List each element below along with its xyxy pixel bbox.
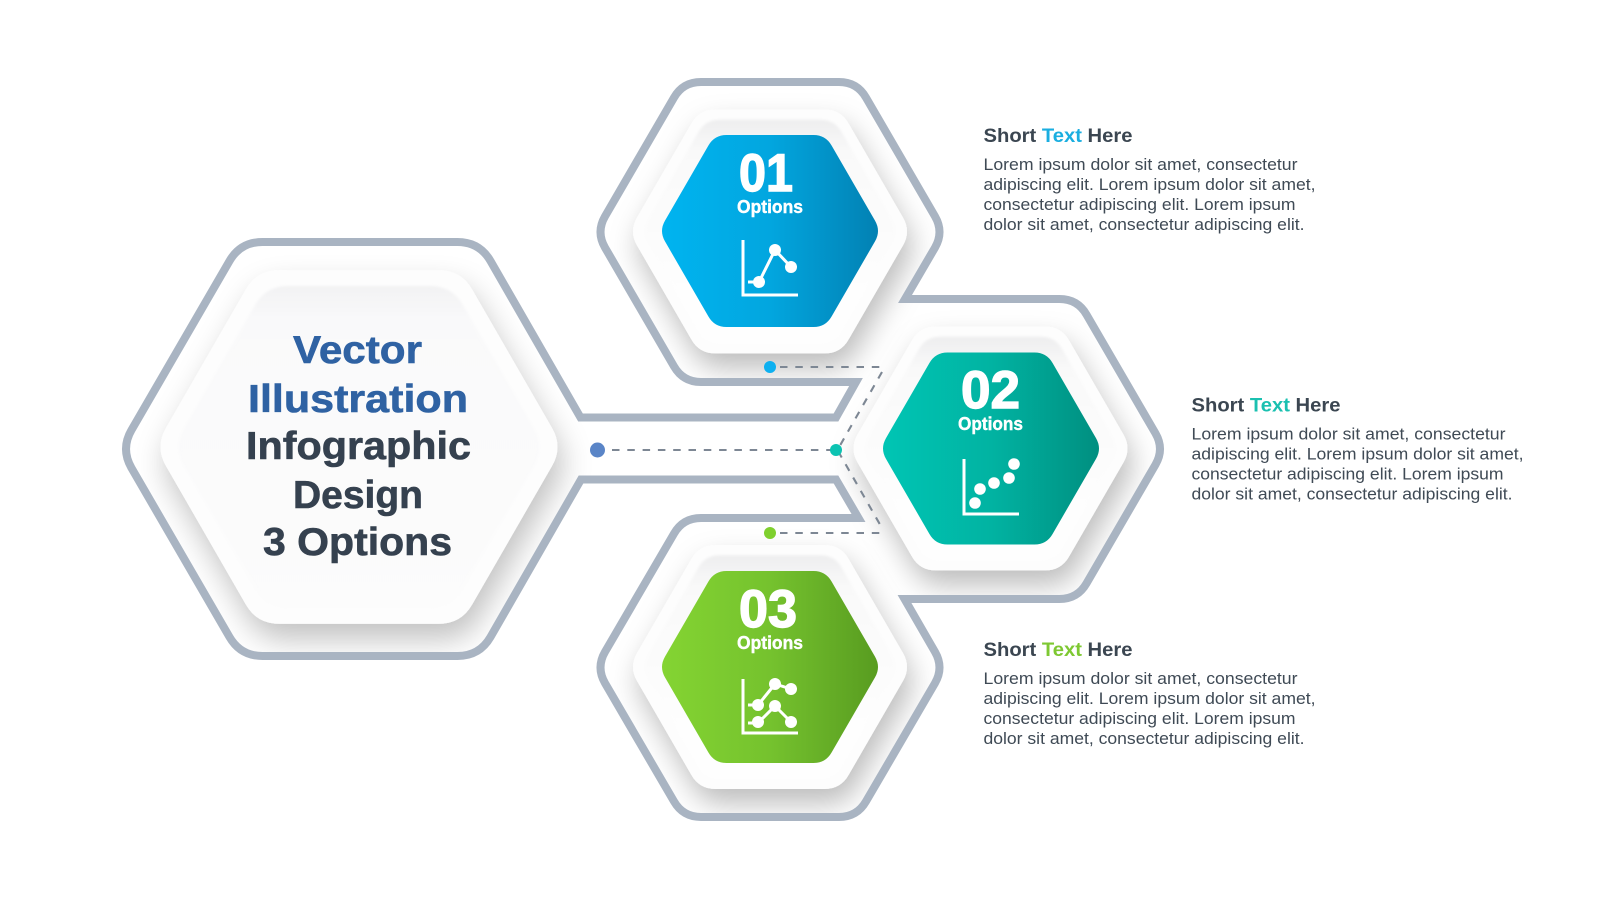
- body: Lorem ipsum dolor sit amet, consectetur: [984, 669, 1298, 688]
- heading: Short Text Here: [984, 640, 1132, 661]
- body: Lorem ipsum dolor sit amet, consectetur: [984, 155, 1298, 174]
- title: Infographic: [246, 425, 471, 468]
- panel: option 1: [644, 120, 896, 343]
- option 1 raised plate: [633, 110, 907, 354]
- body: [1192, 424, 1524, 504]
- number 01: 01: [739, 144, 793, 203]
- main hexagon raised plate: [160, 270, 558, 624]
- option 2 raised plate: [854, 326, 1128, 570]
- text block: option 2: [1192, 396, 1524, 504]
- hexagon outline stroke: [126, 82, 1160, 817]
- option 3 raised plate: [633, 545, 907, 789]
- body: dolor sit amet, consectetur adipiscing elit.: [984, 729, 1304, 748]
- heading: Short Text Here: [1192, 396, 1340, 416]
- connector dot: main: [590, 442, 605, 458]
- body: dolor sit amet, consectetur adipiscing elit.: [1192, 484, 1512, 504]
- title: [246, 329, 471, 564]
- title: Vector: [293, 329, 422, 372]
- heading: Short Text Here: [984, 126, 1132, 147]
- body: [984, 669, 1316, 748]
- connector dot: option 3: [764, 527, 776, 539]
- body: consectetur adipiscing elit. Lorem ipsum: [984, 709, 1296, 728]
- icon: scatter chart: [964, 458, 1020, 514]
- title: Design: [293, 474, 423, 517]
- body: Lorem ipsum dolor sit amet, consectetur: [1192, 424, 1506, 444]
- body: consectetur adipiscing elit. Lorem ipsum: [1192, 464, 1504, 484]
- body: [984, 155, 1316, 234]
- body: adipiscing elit. Lorem ipsum dolor sit amet,: [984, 689, 1316, 708]
- connector dot: option 2: [830, 444, 842, 456]
- icon: double line chart: [743, 678, 798, 733]
- connector dot: option 1: [764, 361, 776, 373]
- panel: option 2: [865, 337, 1116, 560]
- body: adipiscing elit. Lorem ipsum dolor sit amet,: [984, 175, 1316, 194]
- label options: Options: [737, 197, 803, 217]
- number 02: 02: [961, 361, 1020, 420]
- inner shadows clipped to outline: [160, 110, 1128, 789]
- label options: Options: [958, 414, 1023, 434]
- title: Illustration: [248, 378, 468, 421]
- dashed connectors: [612, 367, 882, 533]
- main hexagon inner plate: [178, 286, 540, 608]
- label options: Options: [737, 633, 803, 653]
- title: 3 Options: [263, 521, 452, 564]
- number 03: 03: [739, 580, 797, 639]
- body: dolor sit amet, consectetur adipiscing elit.: [984, 215, 1304, 234]
- text block: option 3: [984, 640, 1316, 748]
- icon: line chart: [743, 240, 798, 295]
- body: adipiscing elit. Lorem ipsum dolor sit amet,: [1192, 444, 1524, 464]
- body: consectetur adipiscing elit. Lorem ipsum: [984, 195, 1296, 214]
- connected hexagon outline fill: [126, 82, 1160, 817]
- panel: option 3: [644, 555, 896, 779]
- text block: option 1: [984, 126, 1316, 234]
